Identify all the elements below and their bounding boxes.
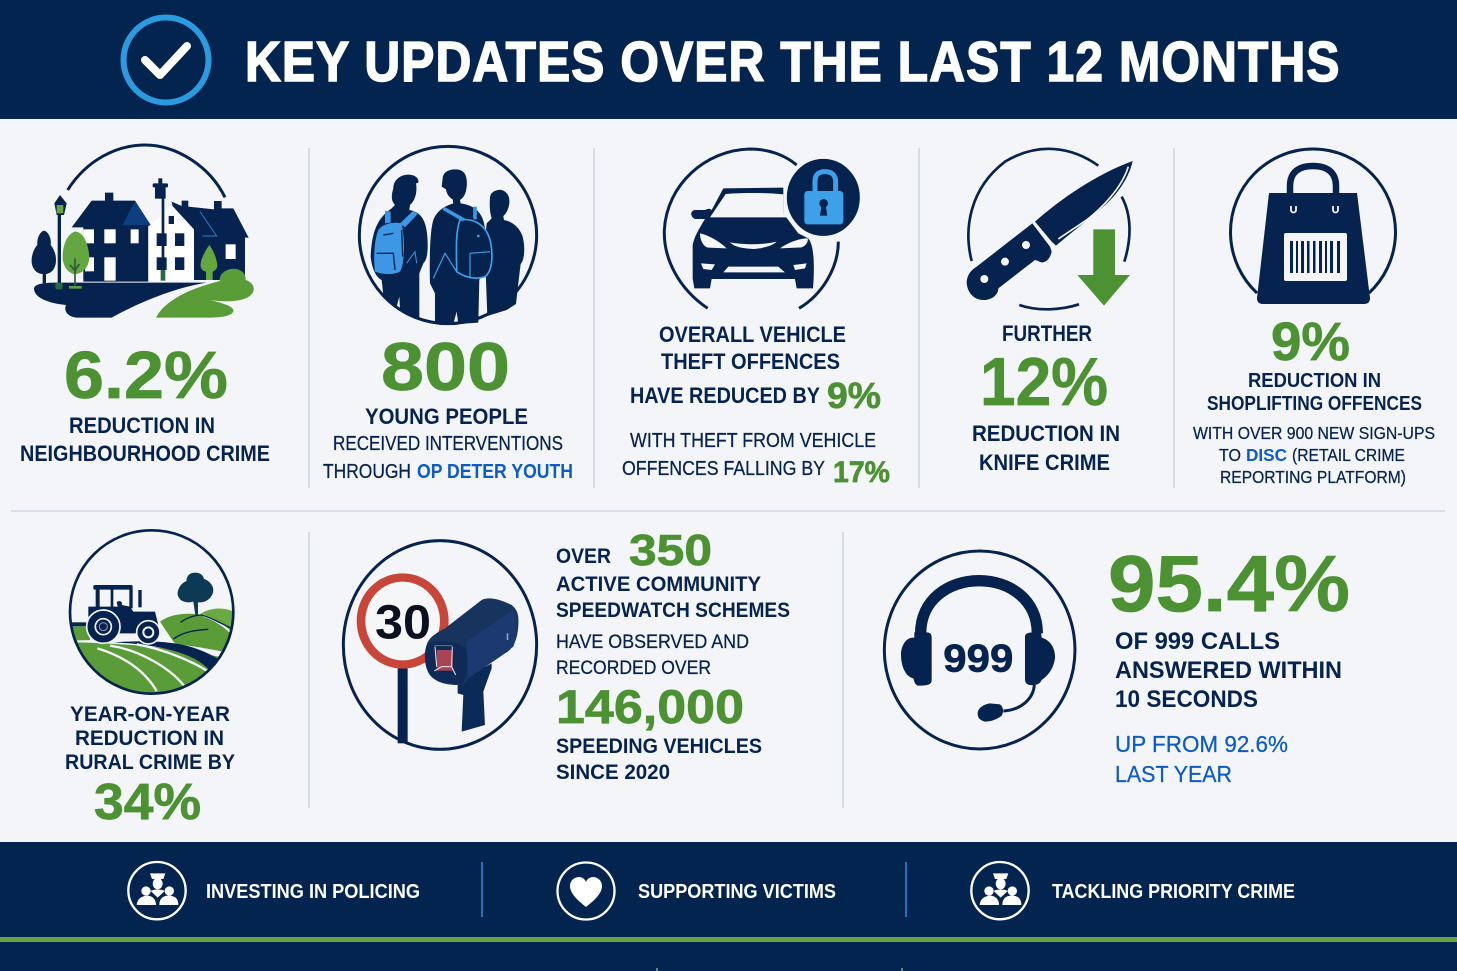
panel: neighbourhood crime (20, 145, 270, 466)
label: speeding vehicles: SPEEDING VEHICLES (556, 735, 762, 758)
stat: 9%: 9% (1271, 312, 1350, 372)
panel: young people (323, 146, 573, 483)
icon: 999 headset: 999 (943, 637, 1013, 681)
stat: 34%: 34% (94, 773, 201, 830)
label: over: OVER (556, 545, 611, 568)
label: reduction in: REDUCTION IN (1248, 370, 1381, 392)
text: through: THROUGH (323, 461, 411, 483)
panel: knife crime (967, 149, 1133, 475)
item: tackling priority crime (971, 862, 1295, 919)
text: with theft from vehicle: WITH THEFT FROM VEHICLE (630, 430, 876, 452)
footer band (0, 842, 1457, 971)
label: answered within: ANSWERED WITHIN (1115, 657, 1342, 684)
panel: community speedwatch (343, 526, 790, 784)
label: INVESTING IN POLICING (206, 881, 420, 903)
label: have reduced by: HAVE REDUCED BY (630, 383, 820, 408)
text: offences falling by: OFFENCES FALLING BY (622, 458, 825, 480)
label: speedwatch schemes: SPEEDWATCH SCHEMES (556, 599, 790, 622)
text: disc: DISC (1246, 445, 1287, 465)
panel: 999 calls (884, 539, 1350, 787)
stat: 17%: 17% (833, 456, 890, 489)
text: op deter youth: OP DETER YOUTH (417, 461, 573, 483)
label: active community: ACTIVE COMMUNITY (556, 573, 761, 596)
panel: vehicle theft (622, 149, 890, 489)
text: reporting platform: REPORTING PLATFORM) (1220, 467, 1406, 487)
icon: tractor in fields (67, 530, 237, 698)
text: up from 92.6%: UP FROM 92.6% (1115, 731, 1288, 757)
stat: 12%: 12% (980, 344, 1108, 420)
label: since 2020: SINCE 2020 (556, 761, 670, 784)
label: further: FURTHER (1002, 321, 1092, 346)
icon: police officers (128, 862, 186, 919)
label: overall vehicle: OVERALL VEHICLE (659, 322, 846, 347)
label: reduction in: REDUCTION IN (972, 421, 1120, 446)
icon: car with padlock (664, 149, 861, 308)
icon: heart (558, 862, 614, 920)
text: last year: LAST YEAR (1115, 761, 1232, 787)
icon: shopping bag with barcode (1230, 149, 1396, 304)
stat: 95.4%: 95.4% (1108, 539, 1350, 628)
text: have observed and: HAVE OBSERVED AND (556, 632, 749, 653)
stat: 146,000: 146,000 (556, 680, 744, 733)
label: knife crime: KNIFE CRIME (979, 450, 1110, 475)
label: TACKLING PRIORITY CRIME (1052, 881, 1295, 903)
icon: neighbourhood houses (32, 145, 254, 318)
label: young people: YOUNG PEOPLE (365, 404, 528, 429)
icon: 999 headset (884, 551, 1075, 749)
label: shoplifting offences: SHOPLIFTING OFFENCES (1207, 393, 1422, 415)
label: rural crime by: RURAL CRIME BY (65, 751, 235, 774)
icon: young people silhouettes (359, 146, 537, 324)
icon: speed sign and camera: 30 (375, 596, 431, 649)
label: reduction in: REDUCTION IN (75, 727, 224, 750)
text: received interventions: RECEIVED INTERVENTIONS (333, 433, 563, 455)
item: investing in policing (128, 862, 420, 919)
stat: 6.2%: 6.2% (64, 338, 228, 413)
label: neighbourhood crime: NEIGHBOURHOOD CRIME (20, 441, 270, 466)
text: sign-ups: WITH OVER 900 NEW SIGN-UPS (1193, 423, 1435, 443)
stat: 9%: 9% (827, 375, 881, 416)
text: retail crime: (RETAIL CRIME (1292, 445, 1405, 465)
label: year-on-year: YEAR-ON-YEAR (70, 703, 230, 726)
title: KEY UPDATES OVER THE LAST 12 MONTHS (245, 31, 1339, 94)
panel: shoplifting (1193, 149, 1435, 487)
stat: 350: 350 (629, 526, 712, 575)
header band (0, 0, 1457, 119)
text: recorded over: RECORDED OVER (556, 658, 711, 679)
icon: check mark badge (124, 18, 208, 102)
panel: rural crime (65, 530, 237, 830)
label: 10 seconds: 10 SECONDS (1115, 686, 1258, 713)
label: theft offences: THEFT OFFENCES (661, 349, 840, 374)
icon: officers group (971, 862, 1029, 919)
icon: knife with down arrow (967, 149, 1133, 309)
label: of 999 calls: OF 999 CALLS (1115, 628, 1280, 655)
icon: speed sign and camera (343, 541, 537, 749)
label: reduction in: REDUCTION IN (69, 413, 215, 438)
text: to: TO (1219, 445, 1241, 465)
stat: 800: 800 (381, 329, 510, 405)
label: SUPPORTING VICTIMS (638, 881, 836, 903)
item: supporting victims (558, 862, 836, 920)
